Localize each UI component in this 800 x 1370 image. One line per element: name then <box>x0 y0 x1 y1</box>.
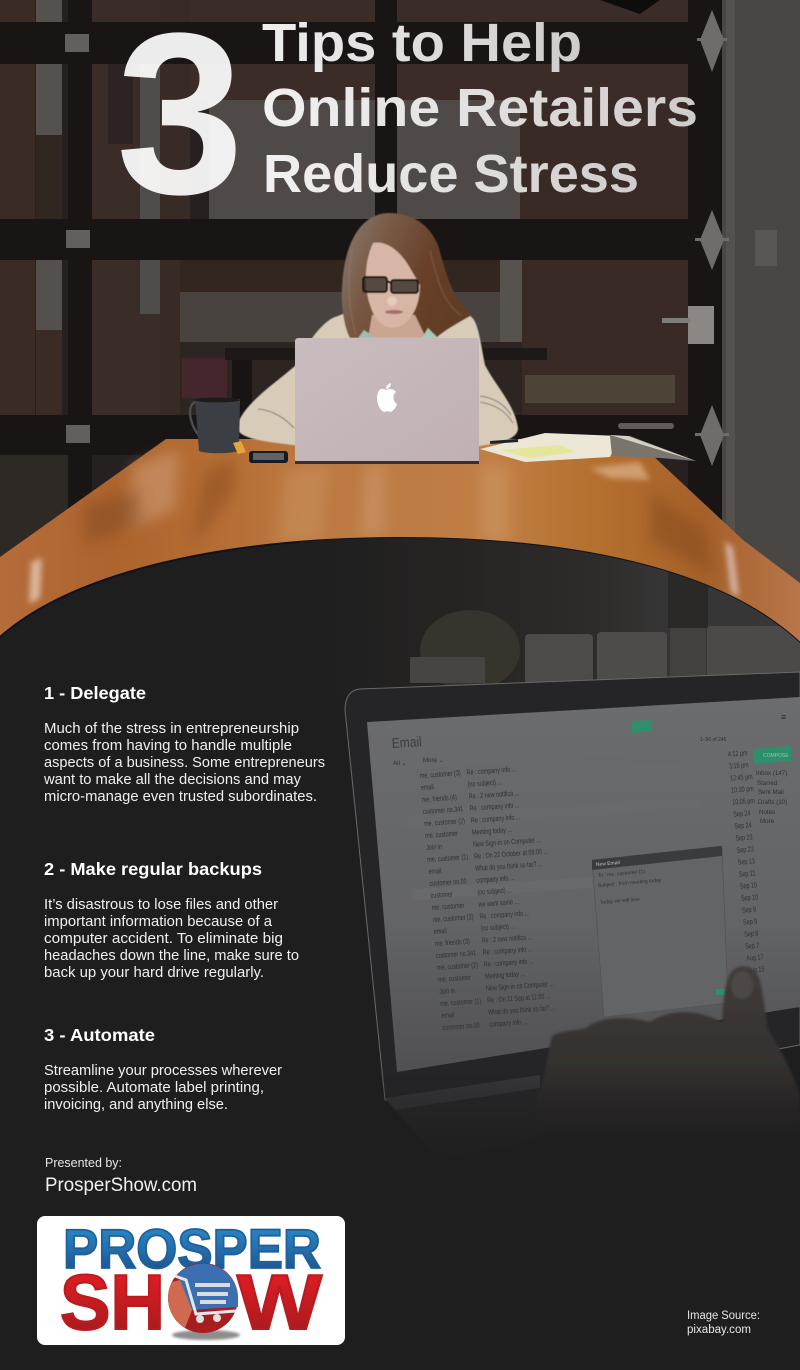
tip 2 body: back up your hard drive regularly. <box>44 965 264 981</box>
message list: me, customer (1) <box>427 853 469 864</box>
message list: Re : company info ... <box>470 802 520 813</box>
message list: me, customer <box>438 974 472 984</box>
tip 1 body: micro-manage even trusted subordinates. <box>44 789 317 805</box>
tip 1 body <box>43 721 325 805</box>
message list: Sep 11 <box>738 870 756 879</box>
message list: 12:45 pm <box>730 773 753 783</box>
tip 3 body: possible. Automate label printing, <box>44 1080 264 1096</box>
smartphone and tag <box>233 441 288 463</box>
lips <box>385 310 403 314</box>
logo: Prosper Show: PROSPER <box>63 1217 321 1280</box>
message list: Sep 7 <box>745 942 760 951</box>
message list: New Sign-in on Computer ... <box>486 980 554 993</box>
tip 2 heading: 2 - Make regular backups <box>44 859 262 879</box>
message list: company info ... <box>476 874 515 885</box>
message list: 10:30 pm <box>731 785 755 795</box>
tip 1 heading: 1 - Delegate <box>44 683 146 703</box>
message list: me, customer (2) <box>424 817 465 828</box>
sidebar: Starred <box>757 780 778 787</box>
title: heading lines: Tips to Help <box>262 13 582 73</box>
sidebar <box>756 770 787 825</box>
inbox title: Email <box>391 733 422 751</box>
compose window: Subject : from meeting today <box>598 877 662 889</box>
nose <box>387 296 397 306</box>
search bar and compose <box>393 712 791 767</box>
tip 3 body: invoicing, and anything else. <box>44 1097 228 1113</box>
tip 1 body: aspects of a business. Some entrepreneurs <box>44 755 325 771</box>
neck and collar <box>358 315 438 338</box>
message list: Re : company info ... <box>484 958 534 969</box>
message list: (no subject) ... <box>477 887 512 897</box>
message list: Re : 2 new notifica ... <box>481 934 533 945</box>
message list: Sep 10 <box>741 894 759 903</box>
sidebar: Sent Mail <box>758 789 784 796</box>
table <box>0 439 800 660</box>
face <box>366 242 420 328</box>
tip 2 body: important information because of a <box>44 914 272 930</box>
logo: Prosper Show: W <box>237 1258 322 1346</box>
tip 2 body <box>44 897 299 981</box>
message list: Re : company info ... <box>471 814 521 825</box>
title: heading lines: Reduce Stress <box>263 144 639 204</box>
window frame bars <box>0 0 722 530</box>
message list: Meeting today ... <box>485 970 525 981</box>
laptop lid <box>345 672 800 1100</box>
presenter website: ProsperShow.com <box>45 1175 197 1196</box>
message list: email <box>441 1011 455 1020</box>
tip 1 body: want to make all the decisions and may <box>43 772 302 788</box>
message list: email <box>434 927 448 936</box>
search bar and compose: COMPOSE <box>763 753 789 759</box>
sidebar: Inbox (147) <box>756 770 787 777</box>
message list: customer no.341 <box>423 805 464 816</box>
title: heading lines <box>262 13 698 204</box>
message list: Meeting today ... <box>472 826 512 837</box>
search bar and compose: 1–50 of 245 <box>700 737 727 743</box>
message list: 4:12 pm <box>728 749 748 759</box>
message list: me, friends (4) <box>422 794 457 804</box>
hand over the laptop <box>537 966 800 1170</box>
sweater <box>237 306 518 446</box>
message list: 3:15 pm <box>729 761 749 771</box>
tip 2 body: It’s disastrous to lose files and other <box>44 897 278 913</box>
message list: Re : company info ... <box>479 910 530 921</box>
message list <box>401 746 774 1034</box>
message list: What do you think so far? ... <box>488 1004 556 1017</box>
message list: me, friends (3) <box>435 938 470 948</box>
message list: What do you think so far? ... <box>475 860 543 873</box>
sidebar: Notes <box>759 809 775 816</box>
message list: me, customer (1) <box>440 997 481 1008</box>
message list: Sep 9 <box>742 906 757 915</box>
message list: email <box>428 867 442 876</box>
message list: me, customer (2) <box>437 961 478 972</box>
open notebook and pen <box>480 433 696 462</box>
tip 3 body: Streamline your processes wherever <box>44 1063 282 1079</box>
search bar and compose: ≡ <box>781 712 786 722</box>
title: heading lines: Online Retailers <box>262 78 698 138</box>
message list: email <box>421 783 435 792</box>
message list: Join in <box>426 843 443 852</box>
message list: Re : company info ... <box>466 766 517 777</box>
image source credit: Image Source: <box>687 1310 760 1322</box>
logo: Prosper Show: SH <box>60 1258 165 1346</box>
compose window: New Email <box>596 860 620 868</box>
search bar and compose: More ⌄ <box>423 757 444 764</box>
message list: Sep 24 <box>733 810 751 819</box>
message list: customer no.00 <box>429 878 467 888</box>
message list: me, customer <box>425 830 459 840</box>
compose window: To : me, customer (1) <box>598 869 646 879</box>
laptop showing email inbox <box>345 672 800 1170</box>
message list: Sep 23 <box>735 834 753 843</box>
dark lower panel with curved top <box>0 538 800 1370</box>
message list: Sep 24 <box>734 822 752 831</box>
screen <box>367 697 800 1072</box>
message list: me, customer (3) <box>419 769 461 780</box>
message list: Sep 23 <box>736 846 754 855</box>
sidebar: Drafts (10) <box>758 799 787 806</box>
message list: Sep 9 <box>743 918 758 927</box>
message list: (no subject) ... <box>480 923 515 933</box>
message list: me, customer <box>431 902 465 912</box>
compose window: Today we will love <box>600 897 640 906</box>
message list: Aug 15 <box>747 966 765 975</box>
faint sofa background <box>300 535 800 695</box>
laptop with apple logo <box>295 338 479 464</box>
message list: 10:05 pm <box>732 797 756 807</box>
bottom cover <box>340 1165 800 1195</box>
coffee mug <box>190 398 240 453</box>
message list: Join in <box>439 987 456 996</box>
bottom fade of the laptop photo <box>340 1070 800 1165</box>
logo: Prosper Show <box>37 1216 345 1346</box>
message list: Aug 17 <box>746 954 764 963</box>
image source credit <box>687 1310 760 1336</box>
tip 1 body: comes from having to handle multiple <box>44 738 292 754</box>
woman <box>237 213 518 446</box>
message list: Sep 10 <box>740 882 758 891</box>
hair strands <box>349 250 462 335</box>
message list: we want some ... <box>477 898 519 909</box>
message list: customer <box>430 891 454 900</box>
message list: Sep 8 <box>744 930 759 939</box>
message list: Sep 13 <box>737 858 755 867</box>
message list: Re : On 11 Sep at 11:00 ... <box>487 993 551 1005</box>
tip 3 body <box>44 1063 282 1113</box>
tip 3 heading: 3 - Automate <box>44 1025 155 1045</box>
hair <box>342 213 472 338</box>
glasses <box>363 277 418 293</box>
message list: customer no.341 <box>436 949 477 960</box>
sidebar: More <box>760 818 775 825</box>
tip 2 body: headaches down the line, make sure to <box>44 948 299 964</box>
tip 1 body: Much of the stress in entrepreneurship <box>44 721 299 737</box>
compose window <box>592 846 728 1017</box>
door hinges <box>65 10 729 466</box>
message list: customer no.00 <box>442 1022 480 1032</box>
message list: me, customer (2) <box>432 913 474 924</box>
image source credit: pixabay.com <box>687 1324 751 1336</box>
message list: Re : 2 new notifica ... <box>468 790 520 801</box>
tip 2 body: computer accident. To eliminate big <box>44 931 283 947</box>
search bar and compose: All ⌄ <box>393 760 407 767</box>
keyboard deck <box>385 1075 540 1160</box>
presented by label: Presented by: <box>45 1156 122 1170</box>
message list: (no subject) ... <box>467 779 502 789</box>
message list: New Sign-in on Computer ... <box>473 836 541 849</box>
photo background: office window wall <box>0 0 800 650</box>
message list: company info ... <box>489 1018 528 1029</box>
message list: Re : On 22 October at 09:00 ... <box>474 848 548 861</box>
logo: shopping cart globe <box>168 1263 238 1333</box>
message list: Re : company info ... <box>482 946 533 957</box>
